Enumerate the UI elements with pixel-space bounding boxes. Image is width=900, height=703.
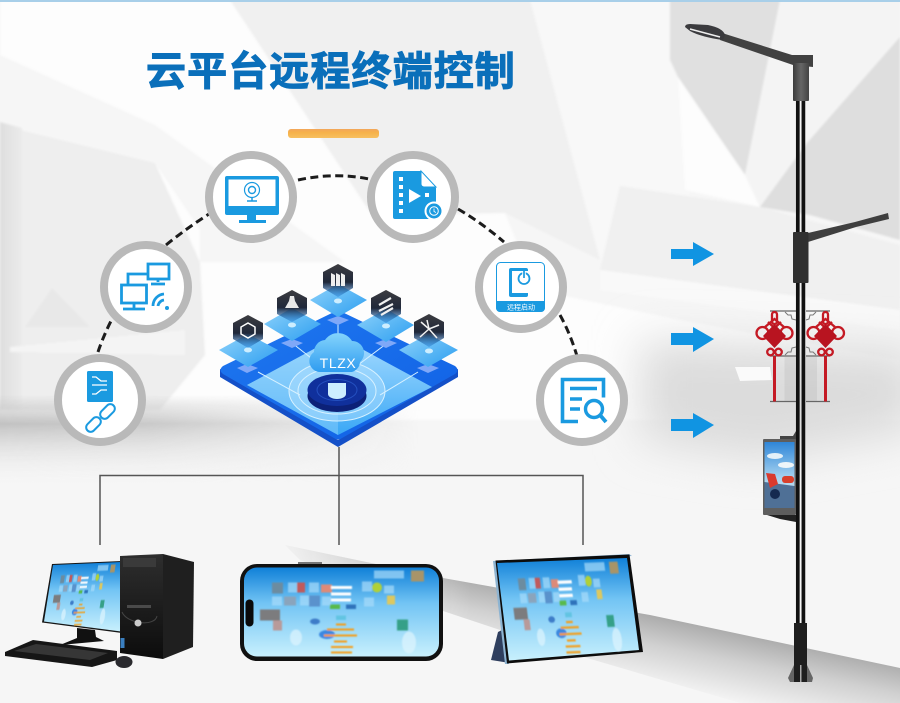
- lower lamp arm: [808, 213, 889, 242]
- module tile mid-left: [264, 290, 321, 348]
- pole base: [788, 623, 813, 682]
- dark blue hub disc: [308, 374, 366, 412]
- blue arrow top: [671, 242, 714, 266]
- smartphone: [240, 562, 443, 661]
- platform base: [220, 311, 458, 447]
- mid housing: [793, 232, 808, 283]
- keyboard: [5, 640, 117, 667]
- icon node: document search: [540, 358, 624, 442]
- chinese knot right: [806, 311, 844, 402]
- blue arrow middle: [671, 327, 714, 352]
- tablet: [491, 554, 643, 664]
- pole rods: [798, 100, 803, 625]
- kickstand: [491, 628, 510, 663]
- tower: [120, 554, 194, 659]
- module tile left: [219, 315, 278, 373]
- icon node: remote start: 远程启动: [507, 302, 535, 312]
- upper housing: [793, 63, 809, 101]
- desktop computer: [5, 554, 194, 668]
- icon node: remote start: [479, 245, 563, 329]
- icon node: document link: [58, 358, 142, 442]
- monitor: [42, 561, 122, 633]
- module tile right: [399, 314, 458, 373]
- connector lines to devices: [100, 447, 583, 545]
- icon node: network computers: [104, 245, 188, 329]
- monitor stand: [60, 628, 104, 645]
- title: 云平台远程终端控制: [146, 50, 516, 94]
- cloud TLZX: TLZX: [320, 355, 356, 371]
- connection beams: [258, 320, 418, 395]
- hub glow rings: [289, 361, 385, 421]
- upper lamp arm: [720, 33, 813, 67]
- module tile top: [310, 264, 367, 325]
- mouse: [116, 656, 132, 668]
- icon node: video file: [371, 155, 455, 239]
- blue arrow bottom: [671, 413, 714, 438]
- cloud platform isometric: [219, 264, 458, 447]
- module tile mid-right: [357, 290, 414, 348]
- LED display screen: [763, 431, 796, 522]
- smart street pole: [685, 24, 889, 682]
- icon node: monitor webcam: [209, 155, 293, 239]
- orange title underline: [288, 129, 379, 138]
- dashed connection arc: [98, 176, 577, 356]
- chinese knot left: [756, 311, 796, 402]
- upper lamp head: [685, 24, 725, 40]
- cloud TLZX: [309, 333, 364, 372]
